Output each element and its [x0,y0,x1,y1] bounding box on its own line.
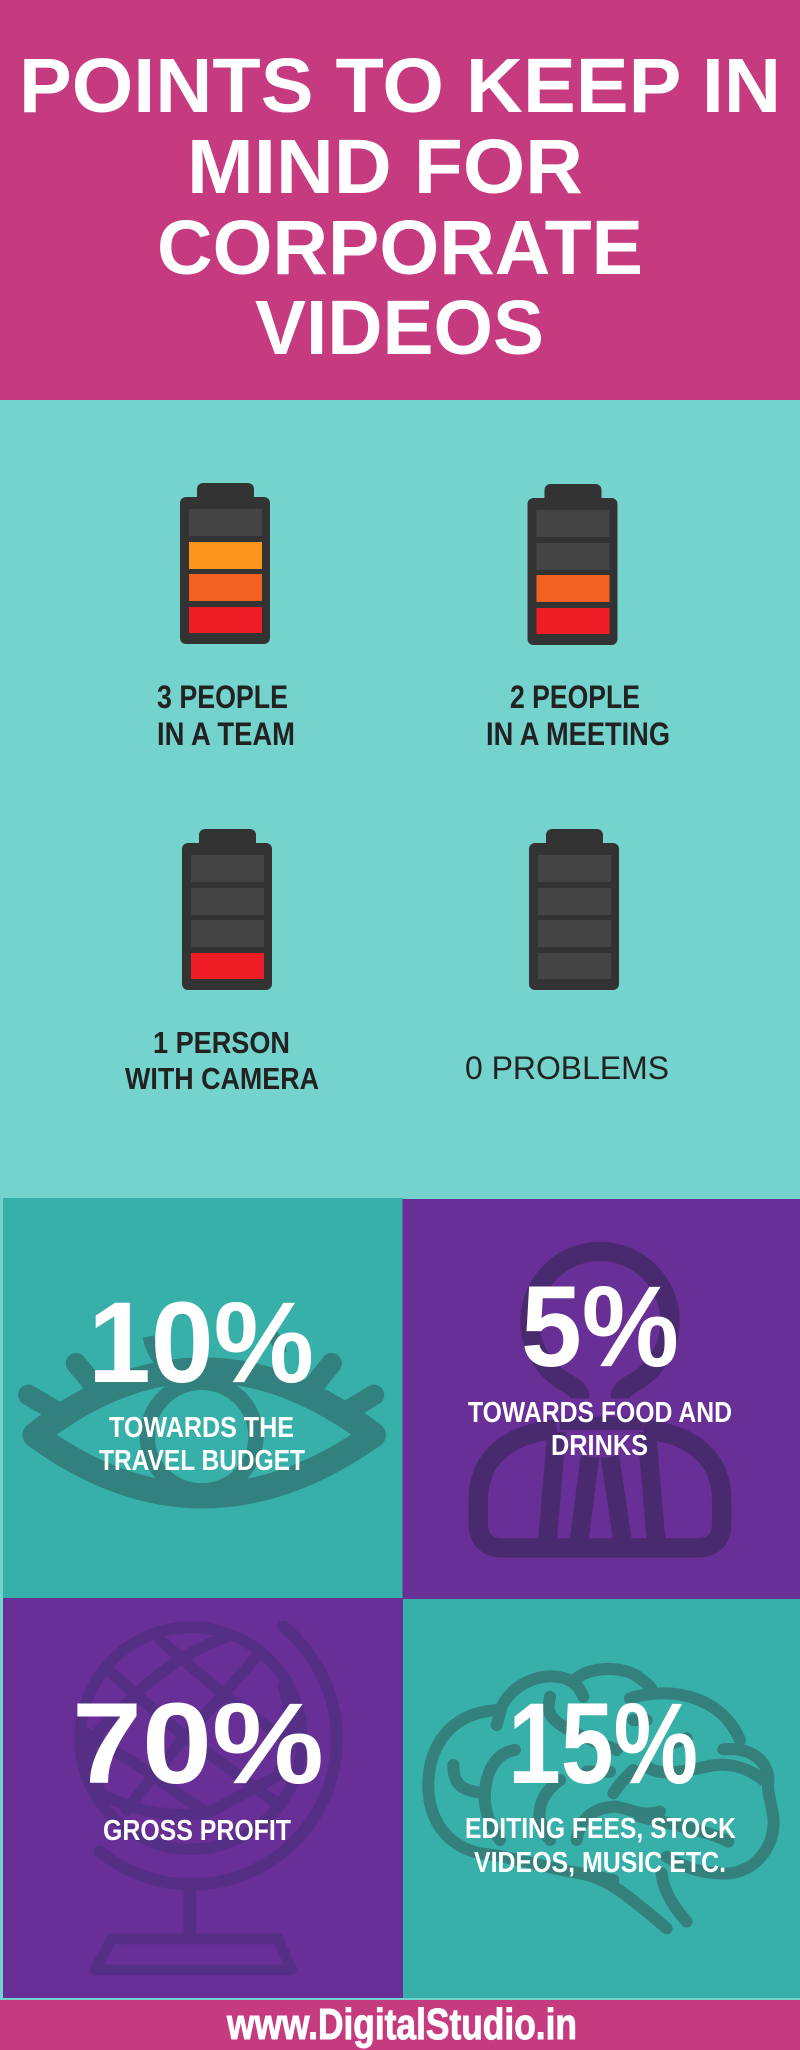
label: editing fees, stock videos, music etc.: EDITING FEES, STOCK [465,1813,736,1845]
icon: battery two charged [528,484,618,645]
panel: 5 percent food and drinks [402,1199,800,1599]
label: 0 problems: 0 PROBLEMS [465,1050,669,1086]
label: 1 person with camera: 1 PERSON [153,1025,290,1060]
header panel [0,0,800,400]
panel: 10 percent travel budget [3,1198,403,1598]
icon: battery empty [529,829,619,990]
footer website text: www.DigitalStudio.in [226,2000,577,2049]
stat: 15%: 15% [508,1680,698,1808]
icon: brain [428,1669,774,1928]
label: towards food and drinks: DRINKS [551,1430,648,1462]
stat: 70%: 70% [72,1680,324,1808]
label: 3 people in a team: IN A TEAM [157,716,295,752]
title: MIND FOR [187,124,583,210]
icon: person [478,1251,722,1548]
icon: globe [80,1627,337,1970]
icon: battery one charged [182,829,272,990]
label: 1 person with camera [125,1025,319,1096]
label: 2 people in a meeting: IN A MEETING [486,716,670,752]
panel: 15 percent editing fees [403,1599,800,1998]
label: gross profit: GROSS PROFIT [103,1815,291,1847]
stat: 5%: 5% [521,1263,679,1391]
label: towards the travel budget [99,1412,305,1477]
label: towards food and drinks: TOWARDS FOOD AND [468,1397,732,1429]
footer band [0,2000,800,2050]
label: 2 people in a meeting [486,679,670,752]
label: 2 people in a meeting: 2 PEOPLE [510,679,640,715]
label: towards the travel budget: TOWARDS THE [109,1412,294,1444]
panel: battery section [0,400,800,1199]
label: 3 people in a team: 3 PEOPLE [157,679,288,715]
icon: battery three charged [180,483,270,644]
label: 1 person with camera: WITH CAMERA [125,1061,319,1096]
icon: eye [28,1330,374,1496]
label: towards the travel budget: TRAVEL BUDGET [99,1445,305,1477]
title [19,43,781,371]
title: CORPORATE [157,205,643,291]
stat: 10%: 10% [88,1279,314,1407]
label: editing fees, stock videos, music etc.: VIDEOS, MUSIC ETC. [474,1847,726,1879]
panel: 70 percent gross profit [3,1598,403,1998]
label: 3 people in a team [157,679,295,752]
title: POINTS TO KEEP IN [19,43,781,129]
title: VIDEOS [255,285,544,371]
label: towards food and drinks [468,1397,732,1462]
label: editing fees, stock videos, music etc. [465,1813,736,1879]
